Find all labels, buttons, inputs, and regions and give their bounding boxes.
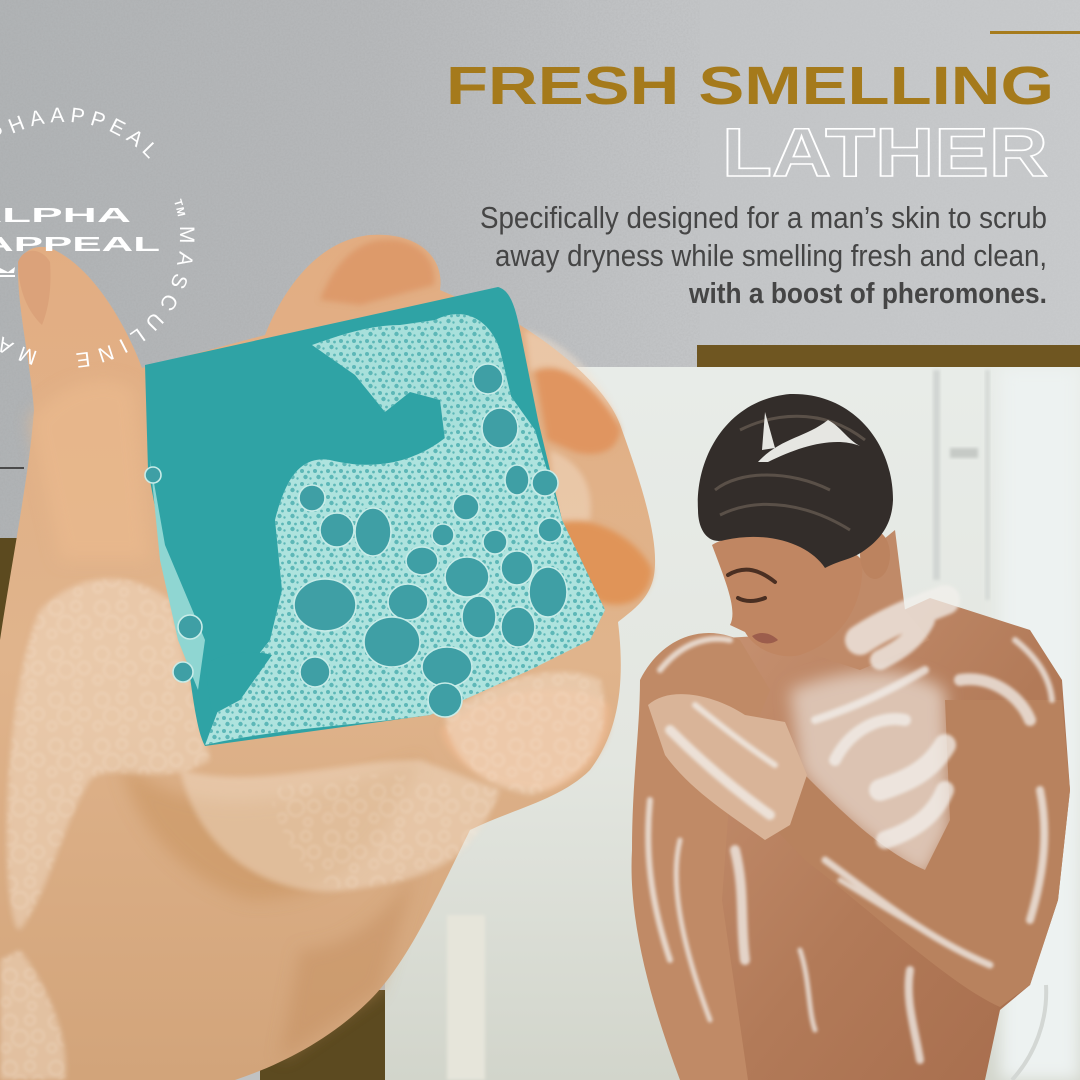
soap: bubbles — [145, 364, 567, 717]
hand: fingertips — [320, 240, 652, 790]
soap: top foam bubbles — [312, 314, 512, 440]
man: face — [712, 531, 862, 656]
panel: shower room background — [385, 367, 1080, 1080]
hand: palm and thumb — [0, 235, 655, 1080]
olive block: bottom — [260, 990, 385, 1080]
hand: thumbnail — [18, 251, 51, 325]
soap: main foam — [205, 395, 605, 745]
man: hair — [698, 394, 893, 568]
olive block: left edge — [0, 538, 40, 658]
man: eyebrow and eye — [728, 570, 775, 601]
heading: lather: LATHER — [722, 114, 1048, 191]
olive bar — [697, 345, 1080, 367]
logo: circular badge — [0, 108, 194, 368]
soap: top foam — [312, 314, 512, 440]
text block: description — [480, 200, 1047, 310]
shower fixture — [933, 370, 1046, 1080]
dark rule: left — [0, 467, 24, 469]
man: hair strands — [715, 416, 865, 530]
man: hand on shoulder — [648, 694, 807, 840]
man: front forearm — [762, 700, 1070, 1007]
photo: hand holding soap — [0, 235, 655, 1080]
heading: fresh smelling: FRESH SMELLING — [446, 56, 1054, 116]
soap: edge foam — [150, 460, 205, 690]
man: left arm — [632, 633, 770, 1080]
man: soap streaks — [648, 600, 1052, 1060]
gold accent line — [990, 31, 1080, 34]
hand: foam patches — [0, 330, 620, 1080]
soap: lower-left teal patch — [205, 652, 272, 715]
man: lips — [752, 633, 778, 643]
man: chest foam — [790, 671, 950, 880]
man: neck — [800, 530, 930, 670]
logo: ring text masculine: MASCULINE — [76, 228, 194, 368]
man: hair foam — [758, 412, 860, 462]
photo: man showering — [632, 394, 1070, 1080]
panel: concrete wall background — [0, 0, 1080, 540]
logo: crown mark — [0, 267, 15, 277]
text block: description: with a boost of pheromones. — [688, 278, 1047, 310]
man: ear — [860, 531, 890, 579]
hand: shading — [30, 380, 420, 1060]
logo: ring trademark: TM — [174, 198, 186, 216]
hand: lacy foam texture — [0, 579, 604, 1080]
soap: main foam bubbles — [205, 395, 605, 745]
soap bar — [145, 287, 605, 746]
man: torso — [690, 598, 1070, 1080]
